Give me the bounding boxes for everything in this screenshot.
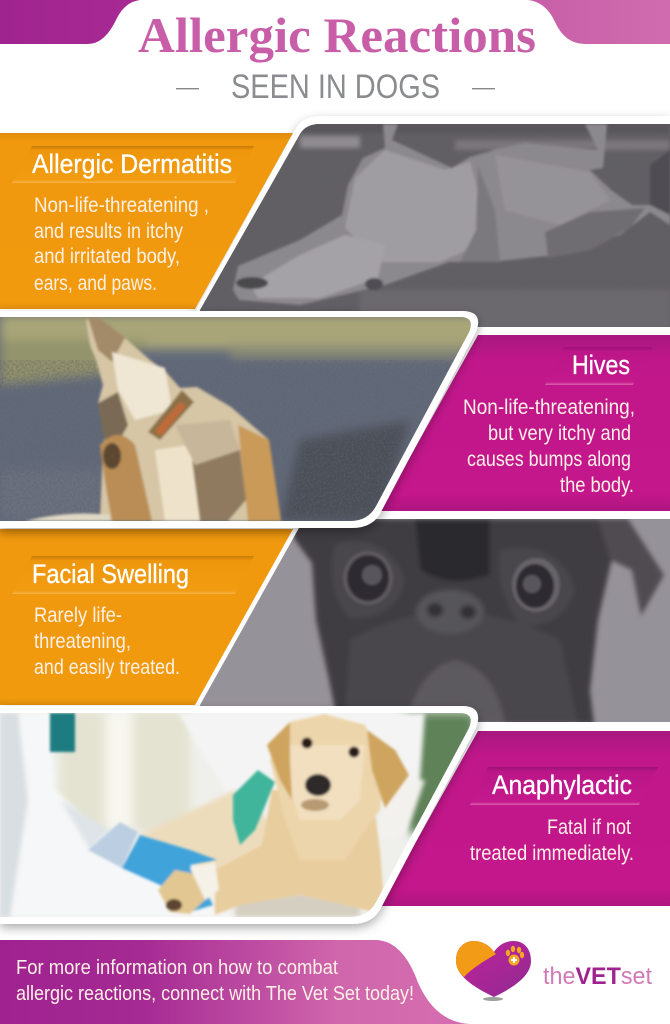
panel: anaphylactic — [380, 731, 670, 906]
icon: heart with paw — [456, 941, 531, 1001]
heading banner: anaphylactic — [470, 767, 658, 805]
description: hives: Non-life-threatening, — [463, 396, 635, 419]
heading banner: hives: Hives — [572, 350, 630, 380]
description: facial swelling: threatening, — [34, 630, 131, 653]
footer band — [0, 940, 470, 1024]
heading banner: facial swelling: Facial Swelling — [32, 559, 189, 589]
header bands — [0, 0, 670, 44]
description: allergic dermatitis: and irritated body, — [34, 245, 180, 268]
description: hives: the body. — [560, 474, 634, 497]
description: allergic dermatitis: and results in itchy — [34, 220, 183, 243]
panel: hives — [380, 327, 670, 518]
footer text: allergic reactions, connect with The Vet Set today! — [16, 983, 414, 1005]
description: allergic dermatitis: Non-life-threatening , — [34, 194, 209, 217]
footer text — [16, 957, 414, 1005]
description: hives: but very itchy and — [488, 422, 631, 445]
photo: vet treating labrador — [0, 706, 480, 924]
description: anaphylactic: treated immediately. — [470, 842, 634, 865]
heading banner: allergic dermatitis: Allergic Dermatitis — [32, 149, 232, 179]
description: hives — [463, 396, 635, 497]
footer text: For more information on how to combat — [16, 957, 338, 979]
description: hives: causes bumps along — [467, 448, 631, 471]
heading banner: anaphylactic: Anaphylactic — [492, 770, 632, 800]
photo: dog rolling on grass — [190, 116, 670, 335]
description: allergic dermatitis — [34, 194, 209, 295]
description: anaphylactic — [470, 816, 634, 865]
logo: the vet set — [456, 941, 652, 1001]
photo: pug close-up — [190, 515, 670, 730]
description: allergic dermatitis: ears, and paws. — [34, 272, 157, 295]
subtitle: SEEN IN DOGS — [231, 68, 440, 106]
description: anaphylactic: Fatal if not — [547, 816, 631, 839]
description: facial swelling: and easily treated. — [34, 656, 180, 679]
panel: allergic dermatitis — [0, 133, 293, 309]
wordmark: theVETset — [543, 963, 652, 990]
title: Allergic Reactions — [138, 7, 536, 63]
photo: scratching dog — [0, 311, 480, 528]
heading banner: facial swelling — [12, 556, 254, 594]
panel: facial swelling — [0, 529, 293, 705]
heading banner: hives — [545, 347, 653, 385]
description: facial swelling — [34, 604, 180, 679]
description: facial swelling: Rarely life- — [34, 604, 122, 627]
